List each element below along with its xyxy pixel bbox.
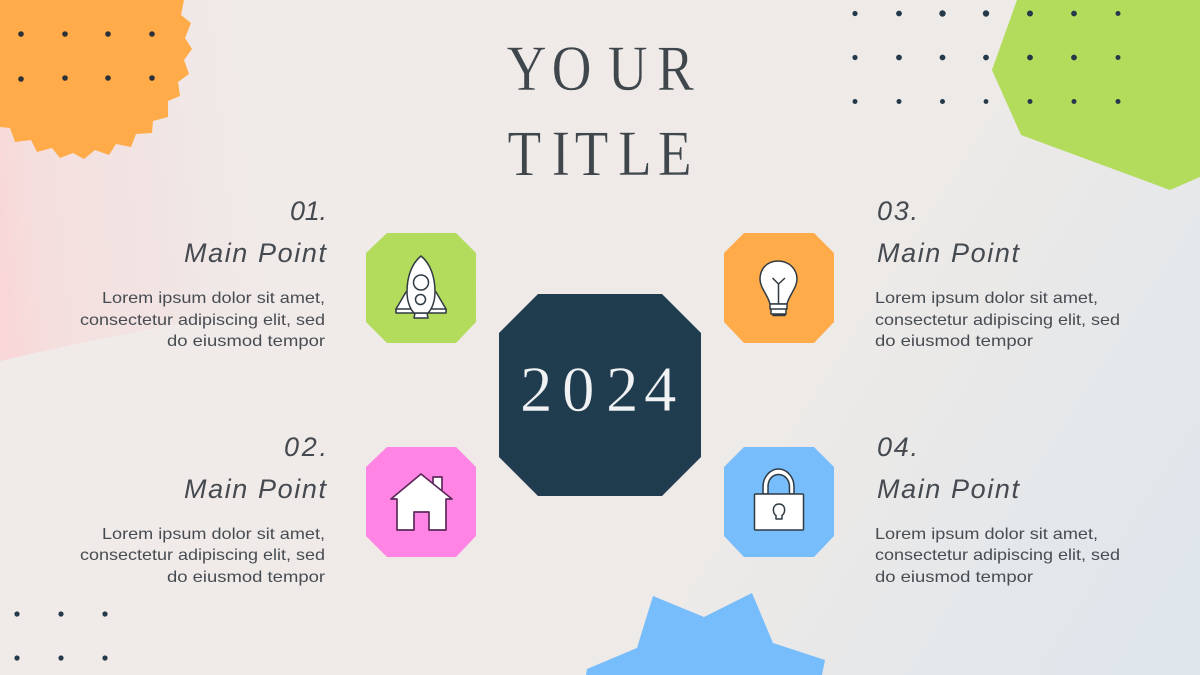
title: TITLE (507, 118, 692, 190)
point 02 text: 02. (284, 432, 327, 462)
decorative orange starburst (0, 0, 192, 159)
point 03 text: Lorem ipsum dolor sit amet, (875, 290, 1098, 307)
dot grid: top right (852, 10, 1120, 104)
icon tile: padlock (724, 447, 834, 557)
center octagon: 2024 (499, 294, 701, 496)
decorative green polygon (992, 0, 1200, 190)
point 03 text: Main Point (877, 238, 1020, 268)
point 02 text (80, 432, 327, 586)
point 03 text: do eiusmod tempor (875, 333, 1034, 350)
title: YOUR (507, 33, 695, 105)
point 04 text: 04. (877, 432, 918, 462)
point 04 text: consectetur adipiscing elit, sed (875, 547, 1120, 564)
point 02 text: Lorem ipsum dolor sit amet, (102, 526, 325, 543)
point 04 text: do eiusmod tempor (875, 569, 1034, 586)
point 02 text: consectetur adipiscing elit, sed (80, 547, 325, 564)
icon tile: house (366, 447, 476, 557)
icon tile: rocket (366, 233, 476, 343)
point 01 text: Main Point (184, 238, 327, 268)
point 04 text (875, 432, 1120, 586)
point 03 text: 03. (877, 196, 918, 226)
point 03 text (875, 196, 1120, 350)
point 01 text: do eiusmod tempor (167, 333, 326, 350)
point 02 text: Main Point (184, 474, 327, 504)
title (507, 33, 695, 190)
point 03 text: consectetur adipiscing elit, sed (875, 312, 1120, 329)
point 04 text: Main Point (877, 474, 1020, 504)
point 01 text: Lorem ipsum dolor sit amet, (102, 290, 325, 307)
dot grid: bottom left (14, 611, 108, 661)
center octagon: 2024: 2024 (520, 354, 676, 426)
point 01 text: consectetur adipiscing elit, sed (80, 312, 325, 329)
dot grid: top left (18, 31, 155, 82)
decorative blue starburst (586, 593, 825, 675)
point 01 text: 01. (290, 196, 327, 226)
point 04 text: Lorem ipsum dolor sit amet, (875, 526, 1098, 543)
point 01 text (80, 196, 327, 350)
icon tile: light bulb (724, 233, 834, 343)
point 02 text: do eiusmod tempor (167, 569, 326, 586)
